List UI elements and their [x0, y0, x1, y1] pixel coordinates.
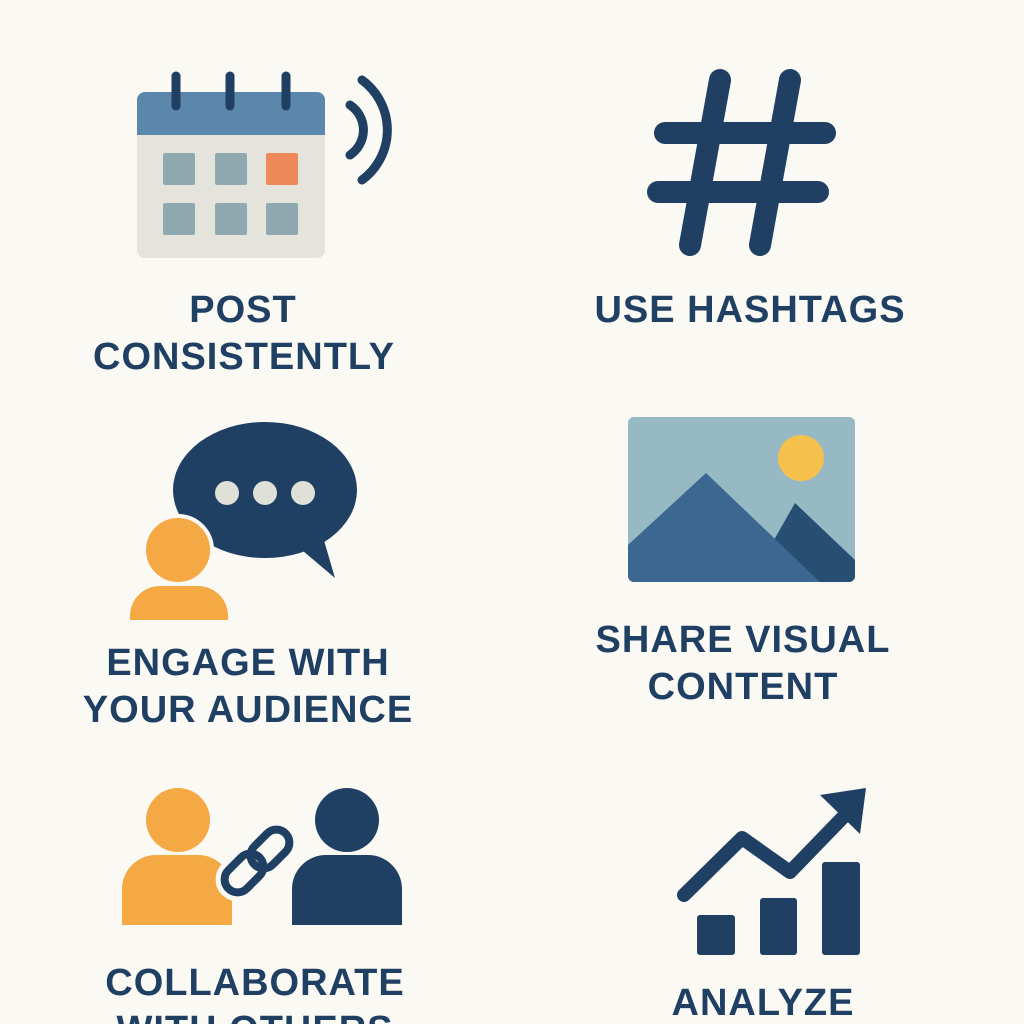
icon: signal arcs — [350, 80, 387, 180]
icon: growth chart — [684, 788, 866, 955]
icon: chat bubble with person — [130, 422, 357, 620]
label: share visual content: SHARE VISUAL — [596, 619, 890, 661]
label: engage with your audience — [83, 642, 413, 731]
label: collaborate with others: COLLABORATE — [105, 962, 405, 1004]
label: collaborate with others — [105, 962, 405, 1024]
label: post consistently — [93, 289, 395, 378]
label: share visual content — [596, 619, 890, 708]
label: share visual content: CONTENT — [648, 666, 838, 708]
label: engage with your audience: ENGAGE WITH — [106, 642, 390, 684]
icon: collaborate people with link — [122, 788, 402, 925]
label: engage with your audience: YOUR AUDIENCE — [83, 689, 413, 731]
label: post consistently: POST — [189, 289, 297, 331]
icon: hashtag — [658, 80, 825, 245]
icon: picture — [628, 417, 855, 582]
label: post consistently: CONSISTENTLY — [93, 336, 395, 378]
label: analyze: ANALYZE — [672, 982, 854, 1024]
label: use hashtags: USE HASHTAGS — [594, 289, 906, 331]
icon: calendar — [137, 76, 325, 258]
